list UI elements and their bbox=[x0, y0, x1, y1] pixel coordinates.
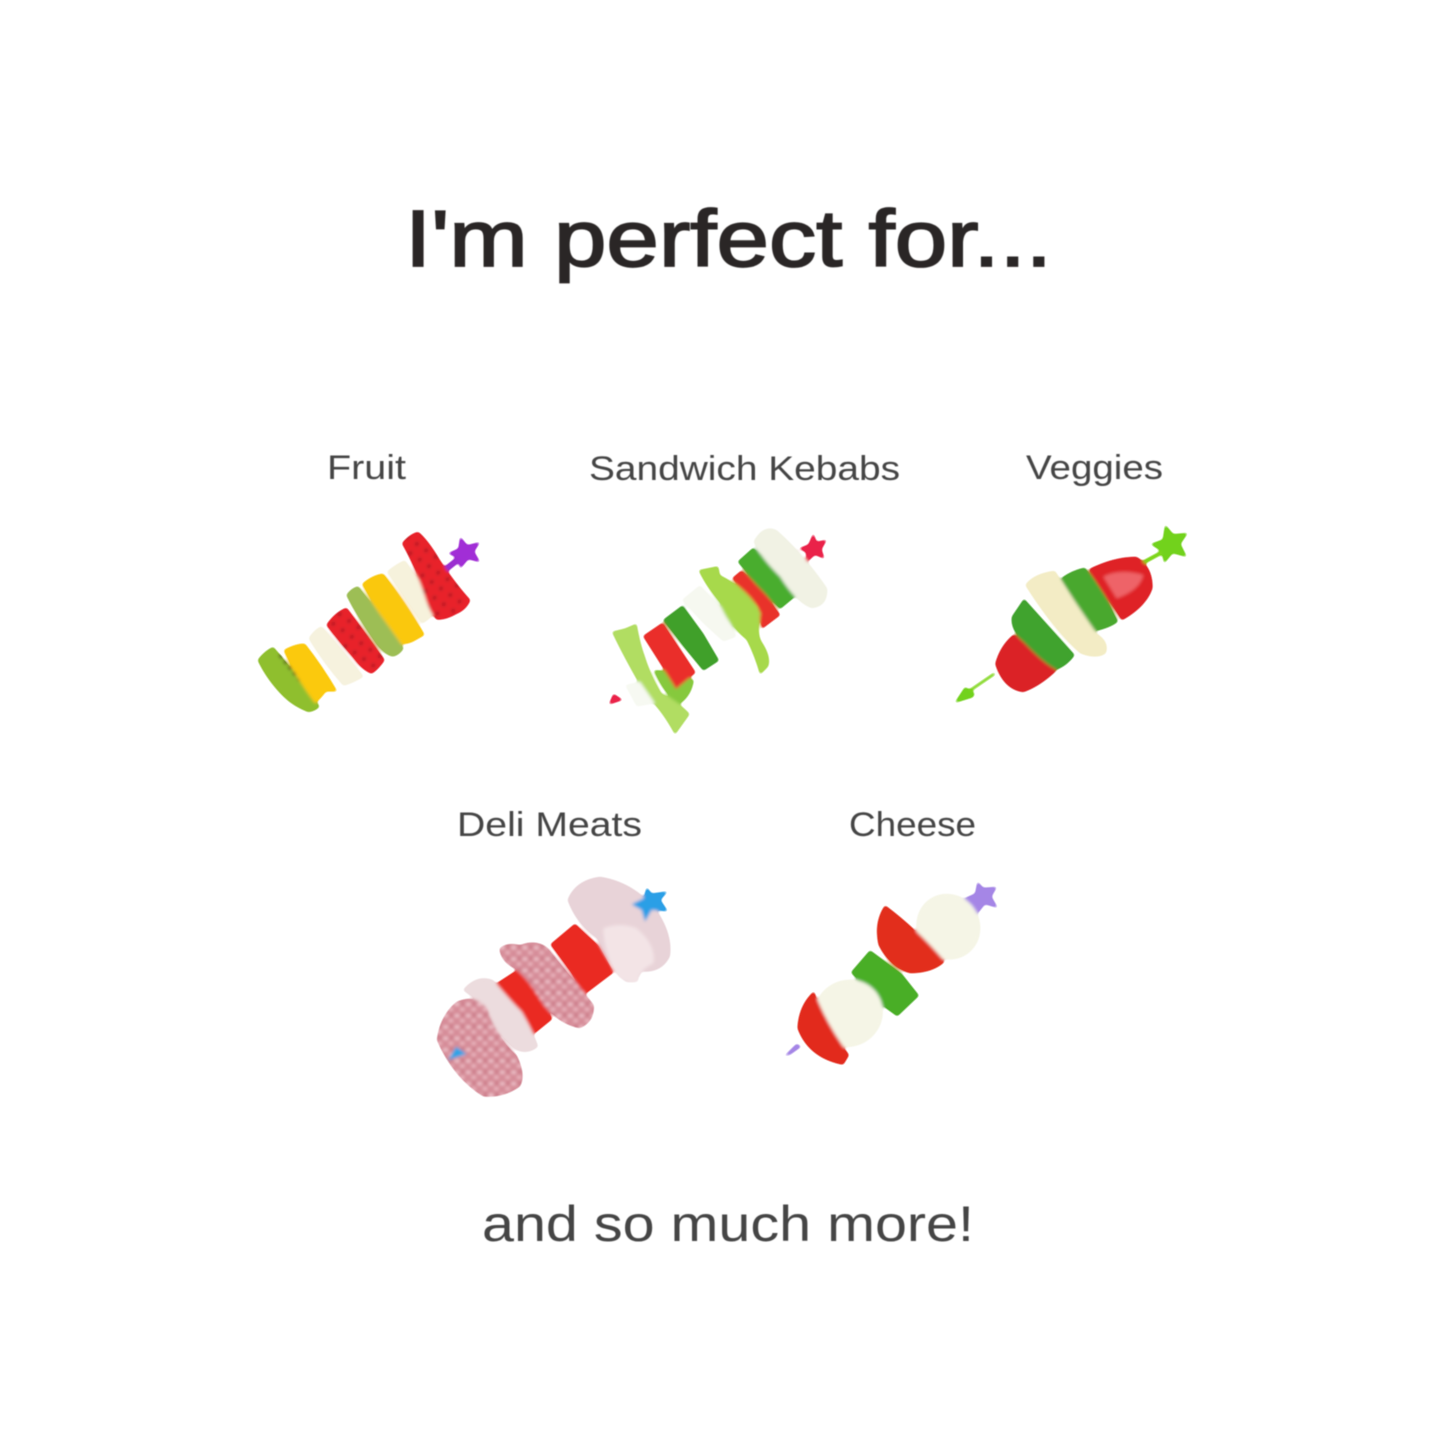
closing line: and so much more! bbox=[482, 1196, 974, 1252]
skewer: cheese bbox=[783, 881, 998, 1065]
skewer: sandwich kebab bbox=[608, 528, 827, 735]
skewer: fruit bbox=[257, 532, 481, 712]
label: Cheese: Cheese bbox=[849, 806, 976, 844]
label: Deli Meats: Deli Meats bbox=[457, 806, 642, 844]
label: Fruit: Fruit bbox=[327, 449, 407, 487]
title: I'm perfect for... bbox=[405, 194, 1052, 283]
skewer: deli meats bbox=[437, 877, 671, 1097]
label: Veggies: Veggies bbox=[1026, 449, 1163, 487]
label: Sandwich Kebabs: Sandwich Kebabs bbox=[589, 450, 900, 488]
skewer: veggies bbox=[954, 524, 1188, 703]
